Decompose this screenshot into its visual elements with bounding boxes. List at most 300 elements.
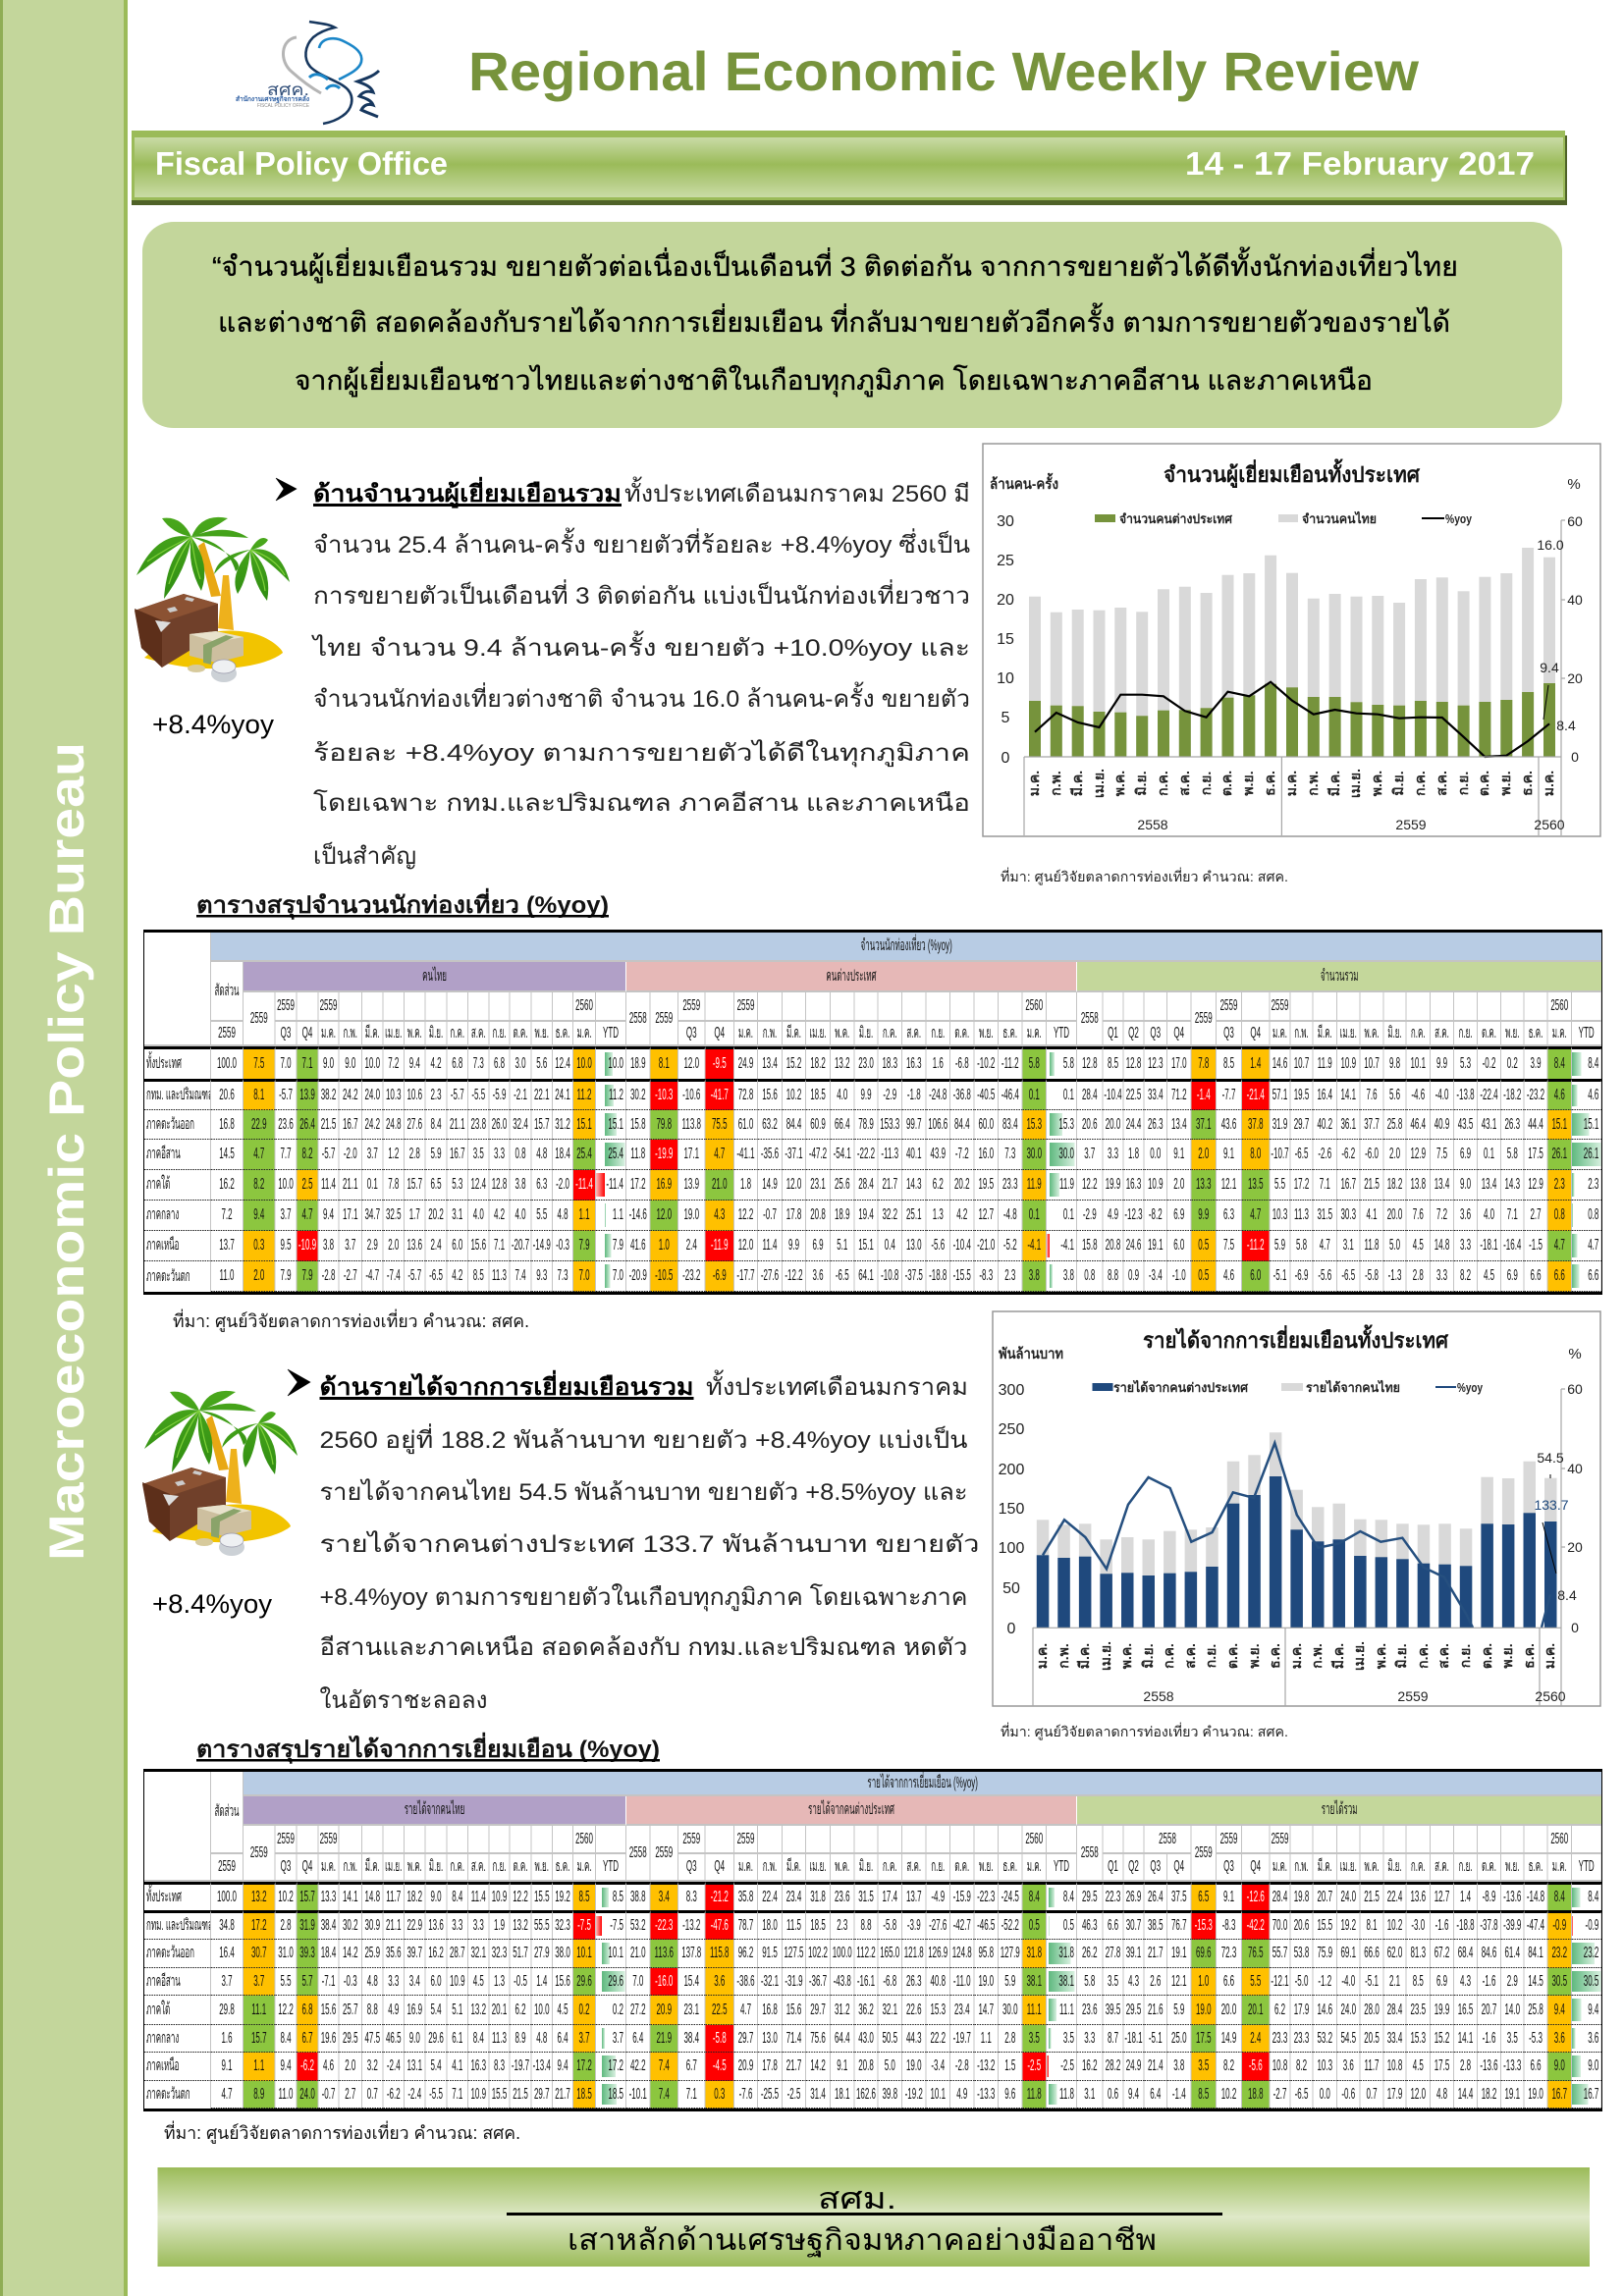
table: visitors %yoy: 11.4: [321, 1176, 336, 1193]
table: tourism revenue %yoy: 0.5: [1029, 1917, 1040, 1934]
table: tourism revenue %yoy: 6.5: [1198, 1889, 1209, 1905]
table: tourism revenue %yoy: 61.4: [1504, 1945, 1520, 1961]
table: visitors %yoy: -14.9: [533, 1237, 551, 1254]
table: visitors %yoy: 16.4: [1317, 1087, 1332, 1103]
table: tourism revenue %yoy: 6.4: [557, 2030, 568, 2046]
table: visitors %yoy: 10.7: [1364, 1055, 1380, 1072]
table: visitors %yoy: 24.2: [364, 1115, 380, 1133]
table: visitors %yoy: -16.4: [1503, 1237, 1521, 1254]
table: tourism revenue %yoy: ก.ค.: [1411, 1858, 1426, 1875]
table: tourism revenue %yoy: -12.6: [1247, 1889, 1265, 1905]
table: visitors %yoy: 153.3: [880, 1115, 899, 1133]
month labels: ธ.ค.: [1521, 1643, 1537, 1669]
table: tourism revenue %yoy: 6.0: [430, 1973, 442, 1989]
table: visitors %yoy: -10.3: [655, 1087, 673, 1103]
table: tourism revenue %yoy: 25.0: [1171, 2030, 1187, 2046]
table: tourism revenue %yoy: 8.4: [473, 2030, 484, 2046]
table: visitors %yoy: 15.1: [858, 1237, 874, 1254]
table: visitors %yoy: 2559: [1195, 1009, 1213, 1027]
table: tourism revenue %yoy: 3.2: [367, 2057, 378, 2074]
table: tourism revenue %yoy: -4.0: [1341, 1973, 1355, 1989]
table: visitors %yoy: 40.1: [906, 1146, 922, 1162]
legend: จำนวนคนต่างประเทศ: [1119, 511, 1233, 526]
table: tourism revenue %yoy: 70.0: [1272, 1917, 1287, 1934]
table: visitors %yoy: 46.4: [1410, 1115, 1426, 1133]
table: visitors %yoy: 3.7: [367, 1146, 378, 1162]
table: visitors %yoy: -6.8: [955, 1055, 969, 1072]
table: visitors %yoy: -40.5: [977, 1087, 995, 1103]
table: visitors %yoy: 8.1: [659, 1055, 670, 1072]
table: visitors %yoy: -2.1: [514, 1087, 527, 1103]
month labels: มี.ค.: [1326, 771, 1342, 796]
table: visitors %yoy: -18.2: [1503, 1087, 1521, 1103]
table: visitors %yoy: 5.1: [837, 1237, 847, 1254]
table: tourism revenue %yoy: 13.2: [513, 1917, 528, 1934]
table: visitors %yoy: 9.8: [1389, 1055, 1400, 1072]
table: visitors %yoy: 3.3: [1108, 1146, 1118, 1162]
table: visitors %yoy: ต.ค.: [1482, 1025, 1496, 1041]
table: tourism revenue %yoy: -2.4: [407, 2085, 421, 2103]
table: tourism revenue %yoy: -11.0: [953, 1973, 971, 1989]
heading: revenue table: ตารางสรุปรายได้จากการเยี่ยมเยือน (%yoy): [196, 1732, 660, 1765]
table: visitors %yoy: 32.2: [882, 1206, 897, 1223]
table: tourism revenue %yoy: 3.7: [221, 1973, 233, 1989]
table: visitors %yoy: -18.1: [1480, 1237, 1498, 1254]
table: visitors %yoy: -10.7: [1271, 1146, 1289, 1162]
table: tourism revenue %yoy: 15.7: [299, 1889, 315, 1905]
table: visitors %yoy: 15.3: [1026, 1115, 1042, 1133]
table: tourism revenue %yoy: 21.7: [786, 2057, 801, 2074]
table: visitors %yoy: 2558: [1081, 1009, 1099, 1027]
table: visitors %yoy: 15.6: [762, 1087, 778, 1103]
table: visitors %yoy: 11.9: [1318, 1055, 1332, 1072]
table: visitors %yoy: 84.4: [954, 1115, 970, 1133]
table: tourism revenue %yoy: 11.0: [279, 2085, 293, 2103]
table: tourism revenue %yoy: 2559: [1220, 1830, 1237, 1847]
table: visitors %yoy: 30.0: [1058, 1146, 1074, 1162]
table: tourism revenue %yoy: 24.0: [1340, 1889, 1356, 1905]
table: visitors %yoy: 0.1: [1029, 1206, 1040, 1223]
table: visitors %yoy: 7.9: [613, 1237, 623, 1254]
table: visitors %yoy: ต.ค.: [513, 1025, 527, 1041]
table: visitors %yoy: -10.8: [881, 1267, 898, 1284]
table: visitors %yoy: -8.3: [979, 1267, 993, 1284]
text block: revenue: รายได้จากคนไทย 54.5 พันล้านบาท ขยายตัว +8.5%yoy และ: [320, 1478, 968, 1506]
table: tourism revenue %yoy: 38.1: [1058, 1973, 1074, 1989]
table: tourism revenue %yoy: Q3: [281, 1858, 291, 1875]
table: visitors %yoy: พ.ย.: [535, 1025, 549, 1041]
table: tourism revenue %yoy: 115.8: [710, 1945, 729, 1961]
table: tourism revenue %yoy: -52.2: [1001, 1917, 1019, 1934]
table: tourism revenue %yoy: เม.ย.: [1340, 1858, 1357, 1875]
table: visitors %yoy: -6.5: [1341, 1267, 1355, 1284]
table: tourism revenue %yoy: มี.ค.: [786, 1858, 801, 1875]
table: visitors %yoy: พ.ค.: [407, 1025, 422, 1041]
table: tourism revenue %yoy: 31.8: [1058, 1945, 1074, 1961]
table: visitors %yoy: 8.5: [1223, 1055, 1234, 1072]
year labels: 2559: [1395, 817, 1427, 832]
table: tourism revenue %yoy: 23.5: [1410, 2001, 1426, 2018]
table: tourism revenue %yoy: 100.0: [833, 1945, 852, 1961]
table: tourism revenue %yoy: รายได้รวม: [1322, 1801, 1358, 1818]
table: visitors %yoy: 3.7: [345, 1237, 355, 1254]
table: tourism revenue %yoy: 29.6: [608, 1973, 623, 1989]
month labels: ก.ย.: [1198, 772, 1214, 795]
table: visitors %yoy: ส.ค.: [471, 1025, 486, 1041]
table: visitors %yoy: 37.7: [1364, 1115, 1380, 1133]
table: visitors %yoy: 8.2: [301, 1146, 313, 1162]
table: tourism revenue %yoy: 20.7: [1317, 1889, 1332, 1905]
table: tourism revenue %yoy: ส.ค.: [1435, 1858, 1449, 1875]
table: visitors %yoy: 8.0: [1250, 1146, 1261, 1162]
table: visitors %yoy: 4.1: [1366, 1206, 1378, 1223]
table: tourism revenue %yoy: -6.2: [300, 2057, 314, 2074]
data labels: [1537, 537, 1576, 733]
table: visitors %yoy: 24.0: [364, 1087, 380, 1103]
month labels: ก.พ.: [1305, 771, 1321, 796]
table: visitors %yoy: 9.9: [860, 1087, 872, 1103]
table: visitors %yoy: -11.3: [881, 1146, 898, 1162]
table: tourism revenue %yoy: 3.6: [1588, 2030, 1598, 2046]
table: visitors %yoy: 99.7: [906, 1115, 922, 1133]
table: tourism revenue %yoy: 24.9: [1126, 2057, 1141, 2074]
table: tourism revenue %yoy: 6.7: [301, 2030, 313, 2046]
table: tourism revenue %yoy: 8.7: [1108, 2030, 1118, 2046]
table: tourism revenue %yoy: 3.6: [1554, 2030, 1565, 2046]
table: tourism revenue %yoy: 22.5: [712, 2001, 728, 2018]
table: visitors %yoy: -9.5: [713, 1055, 727, 1072]
table: tourism revenue %yoy: -16.0: [655, 1973, 673, 1989]
table: visitors %yoy: 15.1: [1584, 1115, 1598, 1133]
month labels: เม.ย.: [1091, 769, 1107, 798]
table: visitors %yoy: 29.7: [1294, 1115, 1309, 1133]
table: visitors %yoy: -20.9: [629, 1267, 647, 1284]
table: tourism revenue %yoy: 3.5: [1063, 2030, 1074, 2046]
table: tourism revenue %yoy: 9.4: [280, 2057, 292, 2074]
table: visitors %yoy: 7.0: [613, 1267, 623, 1284]
text block: visitors: ด้านจำนวนผู้เยี่ยมเยือนรวม: [313, 476, 622, 508]
month labels: ม.ค.: [1542, 1643, 1557, 1669]
table: tourism revenue %yoy: -18.8: [1456, 1917, 1475, 1934]
table: tourism revenue %yoy: YTD: [1579, 1858, 1595, 1875]
table: visitors %yoy: 16.8: [219, 1115, 235, 1133]
table: visitors %yoy: ธ.ค.: [556, 1025, 569, 1041]
table: visitors %yoy: 12.8: [1082, 1055, 1098, 1072]
table: visitors %yoy: 11.2: [577, 1087, 591, 1103]
table: visitors %yoy: 2.0: [388, 1237, 399, 1254]
title: Regional Economic Weekly Review: [468, 40, 1419, 102]
table: visitors %yoy: ภาคอีสาน: [146, 1146, 181, 1162]
table: tourism revenue %yoy: 8.5: [613, 1889, 623, 1905]
table: tourism revenue %yoy: 20.9: [738, 2057, 753, 2074]
table: visitors %yoy: 8.4: [1554, 1055, 1565, 1072]
table: visitors %yoy: 2.4: [430, 1237, 442, 1254]
table: visitors %yoy: YTD: [1054, 1025, 1069, 1041]
table: visitors %yoy: 9.1: [1173, 1146, 1184, 1162]
table: tourism revenue %yoy: 162.6: [856, 2085, 876, 2103]
table: tourism revenue %yoy: 9.1: [221, 2057, 233, 2074]
table: visitors %yoy: 7.6: [1413, 1206, 1424, 1223]
left axis labels: 250: [999, 1421, 1024, 1438]
table: visitors %yoy: 7.5: [253, 1055, 264, 1072]
table: tourism revenue %yoy: 18.2: [1482, 2085, 1496, 2103]
table: visitors %yoy: 3.8: [1063, 1267, 1074, 1284]
right axis labels: 20: [1567, 1539, 1583, 1555]
table: visitors %yoy: 2.0: [1198, 1146, 1209, 1162]
table: tourism revenue %yoy: 27.2: [630, 2001, 646, 2018]
table: tourism revenue %yoy: -31.9: [785, 1973, 803, 1989]
table: visitors %yoy: 7.0: [280, 1055, 292, 1072]
table: visitors %yoy: 19.0: [683, 1206, 699, 1223]
table: visitors %yoy: 31.5: [1317, 1206, 1332, 1223]
table: tourism revenue %yoy: 1.5: [1004, 2057, 1015, 2074]
table: visitors %yoy: 23.6: [278, 1115, 294, 1133]
table: visitors %yoy: มิ.ย.: [859, 1025, 873, 1041]
table: visitors %yoy: 12.4: [555, 1055, 570, 1072]
table: visitors %yoy: 6.5: [430, 1176, 442, 1193]
table: tourism revenue %yoy: 55.5: [534, 1917, 550, 1934]
table: visitors %yoy: -6.2: [1341, 1146, 1355, 1162]
table: tourism revenue %yoy: 1.6: [221, 2030, 233, 2046]
table: visitors %yoy: 6.0: [452, 1237, 462, 1254]
table: tourism revenue %yoy: 8.9: [514, 2030, 526, 2046]
table: tourism revenue %yoy: 4.1: [452, 2057, 462, 2074]
table: visitors %yoy: ก.ค.: [450, 1025, 464, 1041]
table: tourism revenue %yoy: 3.7: [253, 1973, 264, 1989]
table: visitors %yoy: 12.2: [738, 1206, 753, 1223]
year labels: [1143, 1688, 1566, 1704]
table: tourism revenue %yoy: 25.7: [343, 2001, 358, 2018]
table: visitors %yoy: 2.0: [1173, 1176, 1184, 1193]
month labels: มี.ค.: [1076, 1643, 1092, 1669]
table: tourism revenue %yoy: ภาคอีสาน: [146, 1973, 181, 1989]
table: visitors %yoy: 4.7: [253, 1146, 264, 1162]
table: visitors %yoy: -10.6: [682, 1087, 700, 1103]
table: tourism revenue %yoy: ก.พ.: [343, 1858, 357, 1875]
table: tourism revenue %yoy: -7.5: [610, 1917, 623, 1934]
table: tourism revenue %yoy: 38.0: [555, 1945, 570, 1961]
table: visitors %yoy: 16.9: [656, 1176, 672, 1193]
table: tourism revenue %yoy: ก.ย.: [493, 1858, 506, 1875]
table: visitors %yoy: มี.ค.: [1318, 1025, 1332, 1041]
table: visitors %yoy: 2.8: [409, 1146, 420, 1162]
table: visitors %yoy: -5.7: [279, 1087, 293, 1103]
table: tourism revenue %yoy: ต.ค.: [1482, 1858, 1496, 1875]
table: visitors %yoy: 6.6: [1530, 1267, 1542, 1284]
table: tourism revenue %yoy: 21.0: [630, 1945, 646, 1961]
table: visitors %yoy: 12.2: [1082, 1176, 1098, 1193]
table: tourism revenue %yoy: -1.2: [1318, 1973, 1331, 1989]
month labels: มิ.ย.: [1133, 771, 1149, 796]
table: visitors %yoy: 19.9: [1106, 1176, 1120, 1193]
table: tourism revenue %yoy: 14.6: [1317, 2001, 1332, 2018]
table: visitors %yoy: 2560: [575, 997, 593, 1014]
table: visitors %yoy: -11.2: [1001, 1055, 1019, 1072]
right axis labels: 40: [1567, 1461, 1583, 1476]
table: tourism revenue %yoy: -16.1: [857, 1973, 875, 1989]
table: tourism revenue %yoy: 42.2: [630, 2057, 646, 2074]
table: tourism revenue %yoy: 14.8: [364, 1889, 380, 1905]
table: visitors %yoy: 5.8: [1029, 1055, 1040, 1072]
table: visitors %yoy: -4.8: [1003, 1206, 1017, 1223]
table: visitors %yoy: -2.0: [556, 1176, 569, 1193]
table: tourism revenue %yoy: 31.8: [1026, 1945, 1042, 1961]
table: tourism revenue %yoy: 35.6: [386, 1945, 402, 1961]
left axis labels: 10: [997, 670, 1014, 687]
table: tourism revenue %yoy: -0.7: [322, 2085, 335, 2103]
table: tourism revenue %yoy: -5.8: [713, 2030, 727, 2046]
table: visitors %yoy: -5.6: [931, 1237, 945, 1254]
table: tourism revenue %yoy: ต.ค.: [513, 1858, 527, 1875]
table: tourism revenue %yoy: 69.1: [1340, 1945, 1356, 1961]
table: tourism revenue %yoy: -2.5: [1060, 2057, 1074, 2074]
table: visitors %yoy: 15.7: [534, 1115, 550, 1133]
table: tourism revenue %yoy: 2559: [320, 1830, 337, 1847]
table: tourism revenue %yoy: 16.9: [406, 2001, 422, 2018]
table: tourism revenue %yoy: 10.8: [1387, 2057, 1402, 2074]
table: visitors %yoy: มิ.ย.: [1387, 1025, 1402, 1041]
table: visitors %yoy: 6.6: [1588, 1267, 1598, 1284]
data labels: 54.5: [1537, 1450, 1564, 1466]
table: tourism revenue %yoy: 19.0: [1528, 2085, 1543, 2103]
table: tourism revenue %yoy: -46.5: [977, 1917, 995, 1934]
table: tourism revenue %yoy: 4.8: [536, 2030, 547, 2046]
table: tourism revenue %yoy: 64.4: [835, 2030, 850, 2046]
table: tourism revenue %yoy: 6.6: [1108, 1917, 1118, 1934]
table: tourism revenue %yoy: 13.7: [906, 1889, 922, 1905]
table: tourism revenue %yoy: 11.5: [786, 1917, 801, 1934]
table: visitors %yoy: 3.3: [494, 1146, 505, 1162]
table: visitors %yoy: 13.2: [835, 1055, 850, 1072]
table: visitors %yoy: 14.8: [1435, 1237, 1449, 1254]
table: visitors %yoy: 0.9: [1128, 1267, 1139, 1284]
table: tourism revenue %yoy: 1.1: [253, 2057, 264, 2074]
table: visitors %yoy: 9.9: [1198, 1206, 1209, 1223]
table: visitors %yoy: 17.5: [1528, 1146, 1543, 1162]
table: visitors %yoy: 19.4: [858, 1206, 874, 1223]
table: tourism revenue %yoy: 17.2: [608, 2057, 623, 2074]
table: visitors %yoy: 20.6: [1082, 1115, 1098, 1133]
table: tourism revenue %yoy: -4.9: [931, 1889, 945, 1905]
table: visitors %yoy: 84.4: [786, 1115, 801, 1133]
table: tourism revenue %yoy: Q2: [1128, 1858, 1139, 1875]
chart: visitors nationwide: %: [1567, 476, 1581, 493]
table: tourism revenue %yoy: รายได้จากคนต่างประเทศ: [808, 1801, 894, 1818]
table: tourism revenue %yoy: 22.4: [762, 1889, 778, 1905]
table: tourism revenue %yoy: 8.1: [1366, 1917, 1378, 1934]
table: visitors %yoy: -1.5: [1529, 1237, 1543, 1254]
table: visitors %yoy: 22.9: [251, 1115, 267, 1133]
logo: สำนักงานเศรษฐกิจการคลัง: [236, 95, 310, 104]
table: tourism revenue %yoy: 23.3: [1294, 2030, 1309, 2046]
year labels: 2559: [1397, 1688, 1429, 1704]
table: visitors %yoy: Q2: [1128, 1025, 1139, 1041]
sidebar title: Macroeconomic Policy Bureau: [39, 742, 94, 1561]
table: visitors %yoy: 2559: [320, 997, 337, 1014]
month labels: ก.พ.: [1309, 1643, 1325, 1669]
table: visitors %yoy: -4.1: [1027, 1237, 1041, 1254]
table: visitors %yoy: 13.7: [219, 1237, 235, 1254]
table: visitors %yoy: 1.3: [933, 1206, 944, 1223]
table: tourism revenue %yoy: -2.4: [387, 2057, 401, 2074]
left axis labels: 30: [997, 513, 1014, 530]
table: tourism revenue %yoy: 16.2: [428, 1945, 444, 1961]
table: visitors %yoy: 8.8: [1108, 1267, 1118, 1284]
table: visitors %yoy: -2.9: [883, 1087, 896, 1103]
table: visitors %yoy: 1.0: [659, 1237, 670, 1254]
table: tourism revenue %yoy: -5.1: [1365, 1973, 1379, 1989]
table: visitors %yoy: -12.3: [1124, 1206, 1143, 1223]
table: visitors %yoy: -35.6: [761, 1146, 779, 1162]
table: visitors %yoy: 25.6: [835, 1176, 850, 1193]
text block: visitors: ไทย จำนวน 9.4 ล้านคน-ครั้ง ขยายตัว +10.0%yoy และ: [311, 630, 970, 662]
table: tourism revenue %yoy: -5.3: [1529, 2030, 1543, 2046]
table: tourism revenue %yoy: 2559: [737, 1830, 754, 1847]
table: tourism revenue %yoy: 4.3: [1460, 1973, 1471, 1989]
table: tourism revenue %yoy: -15.9: [953, 1889, 971, 1905]
table: visitors %yoy: 43.6: [1221, 1115, 1236, 1133]
table: tourism revenue %yoy: -19.7: [953, 2030, 971, 2046]
table: tourism revenue %yoy: 3.1: [1084, 2085, 1095, 2103]
table: visitors %yoy: 43.5: [1458, 1115, 1473, 1133]
table: tourism revenue %yoy: 3.7: [578, 2030, 590, 2046]
month labels: ต.ค.: [1479, 1643, 1494, 1669]
table: tourism revenue %yoy: 30.0: [1002, 2001, 1018, 2018]
table: tourism revenue %yoy: 5.4: [430, 2057, 442, 2074]
table: tourism revenue %yoy: 4.7: [221, 2085, 233, 2103]
table: tourism revenue %yoy: 3.3: [452, 1917, 462, 1934]
table: tourism revenue %yoy: 44.3: [906, 2030, 922, 2046]
table: tourism revenue %yoy: 19.2: [555, 1889, 570, 1905]
table: visitors %yoy: 3.7: [1084, 1146, 1095, 1162]
table: visitors %yoy: 4.2: [494, 1206, 505, 1223]
table: tourism revenue %yoy: 53.2: [630, 1917, 646, 1934]
table: tourism revenue %yoy: 55.7: [1272, 1945, 1287, 1961]
table: tourism revenue %yoy: ภาคตะวันออก: [146, 1945, 194, 1961]
left axis labels: 0: [1007, 1621, 1016, 1637]
table: tourism revenue %yoy: 17.9: [1294, 2001, 1309, 2018]
table: visitors %yoy: 21.5: [321, 1115, 336, 1133]
table: visitors %yoy: 12.1: [1221, 1176, 1236, 1193]
header band: [132, 131, 1567, 205]
table: visitors %yoy: 16.3: [906, 1055, 922, 1072]
table: tourism revenue %yoy: 3.6: [1343, 2057, 1354, 2074]
table: visitors %yoy: 0.1: [1063, 1206, 1074, 1223]
table: visitors %yoy: 17.0: [1171, 1055, 1187, 1072]
left axis labels: 15: [997, 631, 1014, 648]
table: visitors %yoy: 37.1: [1196, 1115, 1212, 1133]
table: visitors %yoy: ธ.ค.: [1529, 1025, 1543, 1041]
legend: [1092, 1379, 1484, 1395]
table: visitors %yoy: 0.1: [1484, 1146, 1494, 1162]
heading: visitors table: ตารางสรุปจำนวนนักท่องเที่ยว (%yoy): [196, 887, 609, 921]
table: visitors %yoy: ก.ย.: [1459, 1025, 1472, 1041]
table: tourism revenue %yoy: 13.1: [406, 2057, 422, 2074]
right axis labels: 60: [1567, 1381, 1583, 1397]
table: visitors %yoy: 1.2: [388, 1146, 399, 1162]
table: visitors %yoy: 4.0: [837, 1087, 847, 1103]
table: tourism revenue %yoy: 95.8: [978, 1945, 994, 1961]
table: visitors %yoy: 64.1: [858, 1267, 874, 1284]
table: visitors %yoy: 15.1: [1551, 1115, 1567, 1133]
table: tourism revenue %yoy: 6.8: [301, 2001, 313, 2018]
table: tourism revenue %yoy: Q3: [1150, 1858, 1161, 1875]
table: tourism revenue %yoy: -5.6: [1249, 2057, 1263, 2074]
table: visitors %yoy: 7.2: [388, 1055, 399, 1072]
table: tourism revenue %yoy: 62.0: [1387, 1945, 1402, 1961]
table: tourism revenue %yoy: 20.1: [1248, 2001, 1264, 2018]
left axis labels: [997, 513, 1014, 767]
